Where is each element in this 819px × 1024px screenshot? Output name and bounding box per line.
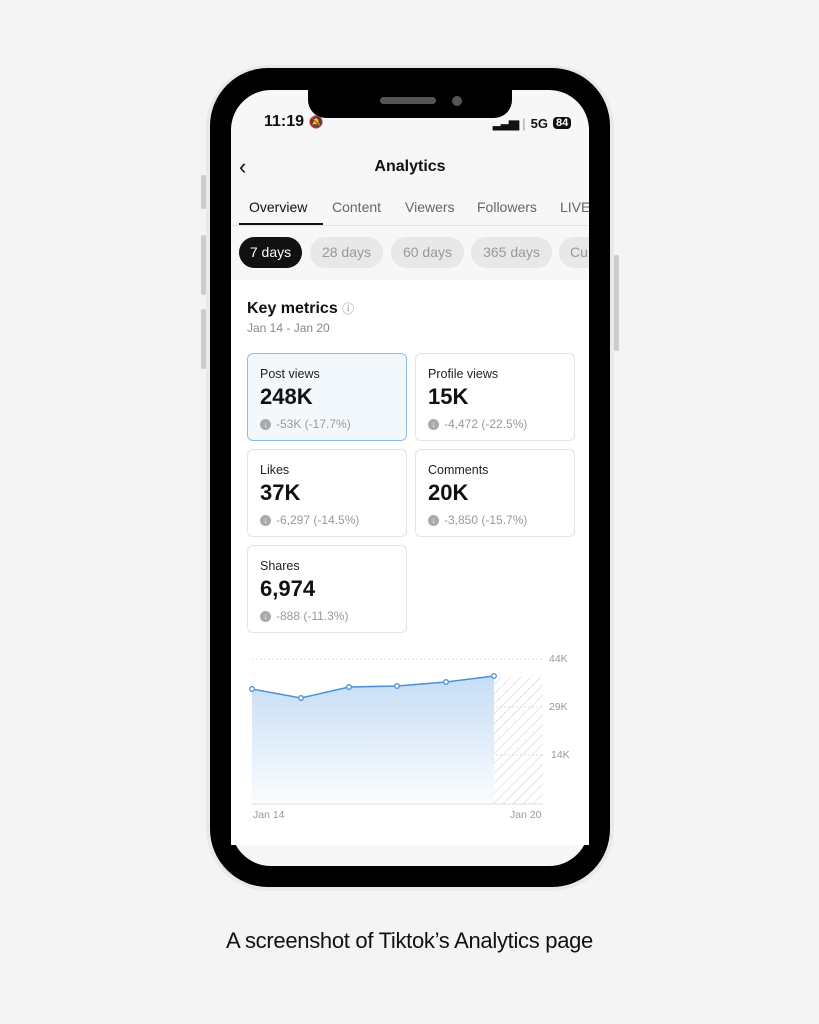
card: profile views: 15K	[428, 384, 468, 409]
card: comments: 20K	[428, 480, 468, 505]
screen: 84	[556, 117, 568, 129]
tabs	[249, 199, 589, 215]
card: comments	[415, 449, 575, 537]
card: profile views: Profile views	[428, 367, 498, 381]
key metrics panel: Jan 14 - Jan 20	[247, 321, 330, 335]
card: post views: -53K (-17.7%)	[276, 417, 351, 431]
text: Cu	[570, 244, 588, 260]
pills	[239, 237, 302, 268]
card: likes: -6,297 (-14.5%)	[276, 513, 359, 527]
card: comments: Comments	[428, 463, 488, 477]
card: comments: ↓	[432, 516, 436, 524]
text: 60 days	[403, 244, 452, 260]
card: shares: Shares	[260, 559, 300, 573]
screen	[231, 90, 589, 866]
screen: 5G	[531, 116, 548, 130]
card: likes: Likes	[260, 463, 289, 477]
card: profile views: ↓	[432, 420, 436, 428]
side buttons	[201, 175, 206, 209]
card: shares	[247, 545, 407, 633]
card: profile views: -4,472 (-22.5%)	[444, 417, 527, 431]
card: likes: ↓	[264, 516, 268, 524]
tabs: Content	[332, 199, 381, 215]
card: comments: -3,850 (-15.7%)	[444, 513, 527, 527]
card: post views: 248K	[260, 384, 313, 409]
tabs: Overview	[249, 199, 307, 215]
header: ‹	[239, 154, 246, 179]
key metrics panel	[231, 280, 589, 845]
card: likes: 37K	[260, 480, 300, 505]
card: shares: -888 (-11.3%)	[276, 609, 348, 623]
screen: Analytics	[374, 158, 446, 175]
line chart: 29K	[549, 701, 568, 713]
line chart: 14K	[551, 749, 570, 761]
line chart: Jan 20	[510, 809, 542, 821]
line chart: Jan 14	[253, 809, 285, 821]
card: likes	[247, 449, 407, 537]
status bar: 11:19 🔕	[264, 113, 323, 130]
key metrics panel: Key metrics ⓘ	[247, 300, 354, 317]
card: post views: ↓	[264, 420, 268, 428]
tabs: Followers	[477, 199, 537, 215]
card: shares: 6,974	[260, 576, 315, 601]
card: post views	[247, 353, 407, 441]
caption: A screenshot of Tiktok’s Analytics page	[226, 928, 593, 953]
screen: |	[522, 116, 526, 130]
screen: ▂▃▅	[493, 115, 517, 130]
text: 365 days	[483, 244, 540, 260]
pills: 7 days	[250, 244, 291, 260]
card: shares: ↓	[264, 612, 268, 620]
text: 28 days	[322, 244, 371, 260]
phone	[206, 65, 614, 891]
notch	[308, 68, 512, 118]
line chart: 44K	[549, 653, 568, 665]
tabs: Viewers	[405, 199, 455, 215]
card: post views: Post views	[260, 367, 320, 381]
card: profile views	[415, 353, 575, 441]
